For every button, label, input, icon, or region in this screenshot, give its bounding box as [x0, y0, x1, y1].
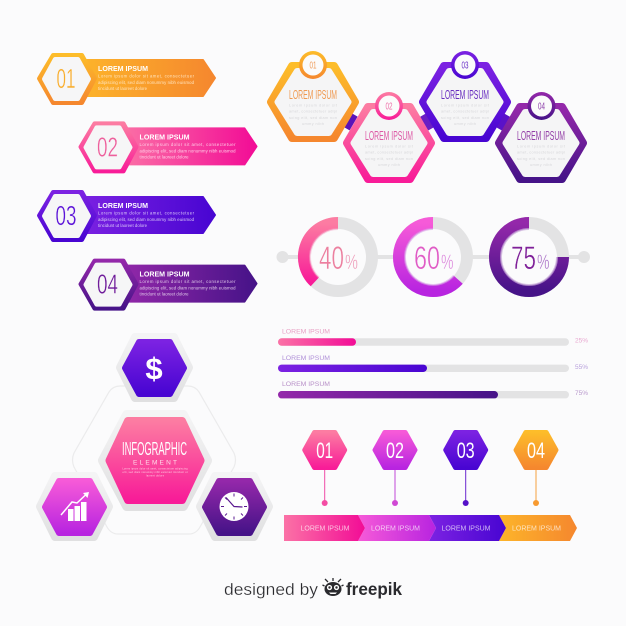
- progress row 75%: [278, 381, 588, 398]
- hexagon card 03: Lorem ipsum dolor sit: [441, 104, 490, 108]
- banner 03 arrow bar: [78, 197, 215, 233]
- hexagon card 02: amet, consectetuer adipi: [365, 150, 413, 154]
- icon: clock: [220, 492, 248, 521]
- donut 40%: [298, 217, 378, 297]
- hexagon card 01: ummy nibh: [302, 122, 324, 126]
- progress row 55%: [278, 355, 588, 372]
- donut 60%: %: [441, 251, 454, 274]
- hexagon card 02: ummy nibh: [378, 163, 400, 167]
- hexagon card 02: LOREM IPSUM: [365, 129, 413, 143]
- arrow ribbon: LOREM IPSUM: [371, 526, 420, 532]
- hexagon card 04: scing elit, sed diam non: [517, 157, 565, 161]
- title: infographic element: ELEMENT: [133, 460, 177, 466]
- pin 03: [445, 432, 486, 506]
- panel: connected hexagons: [271, 51, 583, 179]
- banner 01 text: LOREM IPSUM: [98, 64, 148, 73]
- hexagon card 01: scing elit, sed diam non: [289, 116, 337, 120]
- progress row 75%: 75%: [575, 390, 588, 397]
- hexagon card 01: 01: [309, 60, 317, 72]
- icon: freepik logo: [322, 578, 344, 596]
- connector line: [276, 251, 590, 263]
- progress row 75%: LOREM IPSUM: [282, 381, 330, 388]
- title: infographic element: Lorem ipsum dolor sit amet, consectetuer adipiscing: [122, 468, 188, 470]
- panel: donut charts: [276, 217, 590, 297]
- connector links: [344, 113, 510, 131]
- arrow ribbon: LOREM IPSUM: [512, 526, 561, 532]
- right hexagon: clock: [200, 476, 269, 537]
- banner 03 text: [98, 201, 195, 228]
- pin 01: 01: [316, 438, 333, 463]
- banner 03 text: tincidunt ut laoreet dolore: [98, 223, 148, 228]
- banner 04 text: LOREM IPSUM: [140, 270, 190, 279]
- banner 03 hexagon: [39, 192, 95, 240]
- donut 60%: 60: [414, 240, 440, 276]
- title: infographic element: [122, 439, 188, 478]
- banner 02 text: tincidunt ut laoreet dolore: [140, 154, 189, 159]
- banner 01 text: [98, 64, 195, 91]
- banner 04 text: adipiscing elit, sed diam nonummy nibh euismod: [140, 286, 236, 291]
- pin 04: 04: [527, 438, 545, 463]
- hexagon card 04: [499, 92, 583, 179]
- left hexagon: chart: [40, 476, 109, 537]
- hexagon card 02: scing elit, sed diam non: [365, 157, 413, 161]
- hexagon card 03: LOREM IPSUM: [441, 88, 489, 102]
- banner 01 text: adipiscing elit, sed diam nonummy nibh euismod: [98, 80, 195, 85]
- pin 02: [374, 432, 416, 506]
- hexagon card 04: amet, consectetuer adipi: [517, 150, 565, 154]
- hexagon card 04: ummy nibh: [530, 163, 552, 167]
- hexagon card 01: Lorem ipsum dolor sit: [289, 104, 338, 108]
- arrow ribbon: LOREM IPSUM: [442, 526, 491, 532]
- banner 04 text: [140, 270, 236, 297]
- top hexagon: dollar: [120, 337, 189, 398]
- hexagon card 03: amet, consectetuer adipi: [441, 110, 489, 114]
- donut 75%: %: [537, 251, 550, 274]
- panel: banner 03: [39, 192, 215, 240]
- pin 03: 03: [457, 438, 475, 463]
- banner 02 text: LOREM IPSUM: [140, 132, 190, 141]
- banner 02 text: Lorem ipsum dolor sit amet, consectetuer: [140, 142, 236, 147]
- banner 02 hexagon: 02: [97, 131, 118, 162]
- banner 03 hexagon: 03: [56, 200, 76, 231]
- banner 04 hexagon: [80, 261, 136, 309]
- donut 75%: 75: [511, 240, 536, 276]
- hexagon card 04: 04: [538, 102, 545, 112]
- footer: designed by freepik: [224, 578, 402, 599]
- banner 04 text: Lorem ipsum dolor sit amet, consectetuer: [140, 279, 236, 284]
- banner 01 text: tincidunt ut laoreet dolore: [98, 86, 148, 91]
- title: infographic element: elit, sed diam nonummy nibh euismod tincidunt ut: [123, 471, 188, 474]
- panel: banner 01: [39, 55, 215, 103]
- title: infographic element: laoreet dolore: [146, 474, 165, 478]
- donut 40%: 40: [319, 240, 344, 276]
- banner 03 text: adipiscing elit, sed diam nonummy nibh euismod: [98, 217, 195, 222]
- hexagon card 02: 02: [385, 102, 393, 112]
- banner 02 text: [140, 132, 236, 159]
- title: infographic element: INFOGRAPHIC: [122, 439, 187, 459]
- panel: banner 02: [80, 123, 256, 171]
- icon: growth chart: [61, 492, 89, 521]
- banner 03 text: Lorem ipsum dolor sit amet, consectetuer: [98, 210, 195, 216]
- banner 02 hexagon: [80, 123, 136, 171]
- hexagon card 04: LOREM IPSUM: [517, 129, 565, 143]
- triangle outline: [72, 386, 236, 534]
- banner 04 text: tincidunt ut laoreet dolore: [140, 292, 189, 297]
- panel: numbered timeline: [284, 432, 577, 541]
- panel: progress bars: [278, 328, 588, 398]
- hexagon card 01: amet, consectetuer adipi: [289, 110, 337, 114]
- banner 02 text: adipiscing elit, sed diam nonummy nibh euismod: [140, 148, 236, 153]
- progress row 25%: LOREM IPSUM: [282, 328, 330, 336]
- hexagon card 02: [347, 92, 431, 179]
- panel: banner 04: [80, 261, 256, 309]
- banner 01 arrow bar: [78, 60, 215, 96]
- hexagon card 03: scing elit, sed diam non: [441, 116, 489, 120]
- footer: designed by freepik: designed by: [224, 580, 319, 599]
- hexagon card 01: [271, 51, 355, 138]
- progress row 25%: 25%: [575, 338, 588, 344]
- banner 02 arrow bar: [120, 128, 256, 164]
- panel: triad hexagon diagram: [40, 337, 269, 537]
- banner 01 hexagon: [39, 55, 95, 103]
- icon: dollar: $: [145, 351, 163, 386]
- footer: designed by freepik: freepik: [346, 579, 402, 599]
- donut 75%: [489, 217, 569, 297]
- pin 02: 02: [386, 438, 404, 463]
- banner 04 hexagon: 04: [97, 269, 118, 300]
- banner 04 arrow bar: [120, 266, 256, 302]
- banner 03 text: LOREM IPSUM: [98, 201, 148, 210]
- hexagon card 03: 03: [461, 60, 469, 72]
- pin 04: [516, 432, 556, 506]
- pin 01: [304, 432, 345, 506]
- donut 40%: %: [345, 251, 358, 274]
- progress row 55%: 55%: [575, 364, 588, 371]
- hexagon card 01: LOREM IPSUM: [289, 88, 337, 102]
- hexagon card 04: Lorem ipsum dolor sit: [517, 144, 566, 148]
- arrow ribbon: LOREM IPSUM: [300, 526, 350, 532]
- progress row 25%: [278, 328, 588, 346]
- centre hexagon: title: [103, 415, 207, 506]
- progress row 55%: LOREM IPSUM: [282, 355, 330, 362]
- hexagon card 03: [423, 51, 507, 138]
- donut 60%: [393, 217, 473, 297]
- arrow ribbon: [284, 515, 577, 541]
- banner 01 text: Lorem ipsum dolor sit amet, consectetuer: [98, 74, 195, 78]
- banner 01 hexagon: 01: [56, 63, 76, 94]
- hexagon card 02: Lorem ipsum dolor sit: [365, 144, 414, 148]
- hexagon card 03: ummy nibh: [454, 122, 476, 126]
